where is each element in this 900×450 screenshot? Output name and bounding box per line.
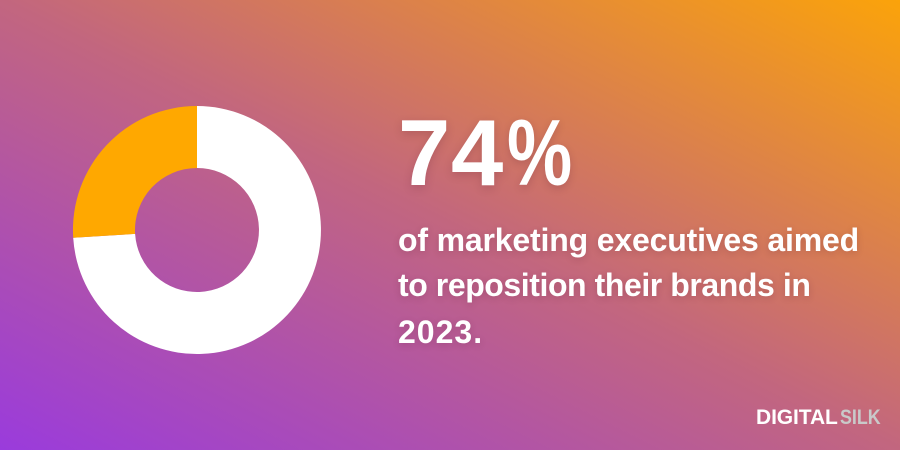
donut chart <box>72 106 321 354</box>
orange segment: 26% <box>73 106 197 238</box>
description text: to reposition their brands in <box>398 267 810 303</box>
description text <box>398 222 859 350</box>
statistic: 74%: % <box>507 100 572 205</box>
description text: of marketing executives aimed <box>398 222 859 258</box>
logo: Digital Silk: SILK <box>840 406 881 429</box>
statistic: 74%: 7 <box>398 100 450 205</box>
statistic: 74%: 4 <box>451 100 503 205</box>
logo: Digital Silk: DIGITAL <box>756 406 838 429</box>
description text: 2023. <box>398 314 483 350</box>
white segment: 74% <box>73 106 321 354</box>
statistic: 74% <box>398 100 572 205</box>
logo: Digital Silk <box>756 406 881 429</box>
